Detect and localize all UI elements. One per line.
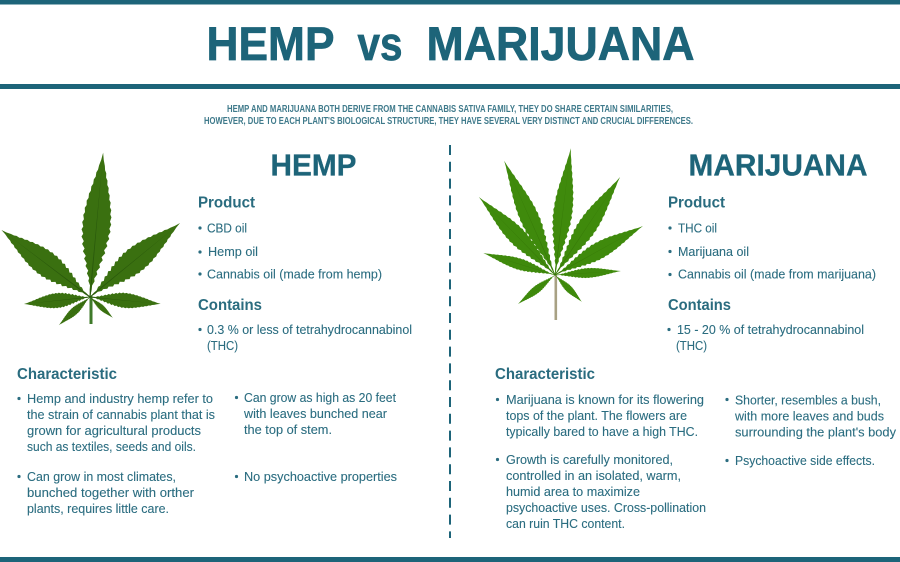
title: vs xyxy=(358,17,402,70)
panel: marijuana xyxy=(472,147,897,531)
product list: CBD oil xyxy=(207,220,247,236)
intro text xyxy=(204,104,693,127)
characteristic column 2 xyxy=(725,392,897,468)
product list xyxy=(198,220,382,282)
characteristic column 1: Marijuana is known for its flowering xyxy=(506,392,704,407)
product list: Cannabis oil (made from hemp) xyxy=(207,266,382,282)
characteristic column 2: with more leaves and buds xyxy=(734,408,884,424)
characteristic column 1: Growth is carefully monitored, xyxy=(506,452,673,467)
contains text xyxy=(667,322,864,353)
characteristic column 1 xyxy=(496,392,706,531)
characteristic column 1: humid area to maximize xyxy=(506,484,640,499)
characteristic column 1: typically bared to have a high THC. xyxy=(506,424,698,439)
heading: hemp: HEMP xyxy=(270,148,356,182)
subheading: characteristic: Characteristic xyxy=(17,366,117,383)
characteristic column 1 xyxy=(17,391,215,516)
top bar xyxy=(0,0,900,4)
title xyxy=(206,17,694,70)
product list: Marijuana oil xyxy=(678,244,749,259)
characteristic column 1: the strain of cannabis plant that is xyxy=(27,407,215,422)
characteristic column 2: Shorter, resembles a bush, xyxy=(735,392,881,408)
characteristic column 1: such as textiles, seeds and oils. xyxy=(27,439,196,454)
subheading: product: Product xyxy=(198,194,256,212)
characteristic column 2: surrounding the plant's body xyxy=(735,424,897,440)
intro text: HEMP AND MARIJUANA BOTH DERIVE FROM THE CANNABIS SATIVA FAMILY, THEY DO SHARE CERTAIN SIMILARITIES, xyxy=(227,104,673,115)
characteristic column 2 xyxy=(235,390,397,484)
subheading: characteristic: Characteristic xyxy=(495,366,595,383)
characteristic column 2: Psychoactive side effects. xyxy=(735,453,875,468)
contains text xyxy=(198,322,412,353)
characteristic column 1: tops of the plant. The flowers are xyxy=(506,408,687,423)
characteristic column 2: Can grow as high as 20 feet xyxy=(244,390,396,405)
characteristic column 1: psychoactive uses. Cross-pollination xyxy=(506,500,706,515)
subheading: contains: Contains xyxy=(668,297,731,314)
contains text: 15 - 20 % of tetrahydrocannabinol xyxy=(677,322,864,337)
center dashed divider xyxy=(449,145,451,538)
subheading: product: Product xyxy=(668,194,726,212)
characteristic column 1: can ruin THC content. xyxy=(506,516,625,531)
bottom bar xyxy=(0,557,900,562)
characteristic column 1: bunched together with orther xyxy=(27,485,195,500)
contains text: (THC) xyxy=(676,338,707,353)
subheading: contains: Contains xyxy=(198,297,262,314)
contains text: (THC) xyxy=(207,338,238,353)
product list: Hemp oil xyxy=(208,244,258,259)
heading: marijuana: MARIJUANA xyxy=(688,148,868,182)
characteristic column 2: No psychoactive properties xyxy=(244,469,397,484)
title underline bar xyxy=(0,84,900,89)
characteristic column 2: the top of stem. xyxy=(244,422,332,437)
icon: marijuana leaf xyxy=(472,147,647,320)
product list: Cannabis oil (made from marijuana) xyxy=(678,266,876,282)
characteristic column 2: with leaves bunched near xyxy=(243,406,388,421)
characteristic column 1: controlled in an isolated, warm, xyxy=(506,468,681,483)
characteristic column 1: Can grow in most climates, xyxy=(27,469,176,484)
characteristic column 1: plants, requires little care. xyxy=(27,501,169,516)
title: HEMP xyxy=(206,17,334,70)
characteristic column 1: Hemp and industry hemp refer to xyxy=(27,391,213,406)
characteristic column 1: grown for agricultural products xyxy=(27,423,201,438)
icon: hemp leaf xyxy=(0,151,188,328)
contains text: 0.3 % or less of tetrahydrocannabinol xyxy=(207,322,412,337)
intro text: HOWEVER, DUE TO EACH PLANT'S BIOLOGICAL STRUCTURE, THEY HAVE SEVERAL VERY DISTINCT AND CRUCIAL DIFFERENCES. xyxy=(204,116,693,127)
title: MARIJUANA xyxy=(426,17,694,70)
product list xyxy=(668,220,876,282)
product list: THC oil xyxy=(678,220,717,236)
panel: hemp xyxy=(0,148,412,516)
